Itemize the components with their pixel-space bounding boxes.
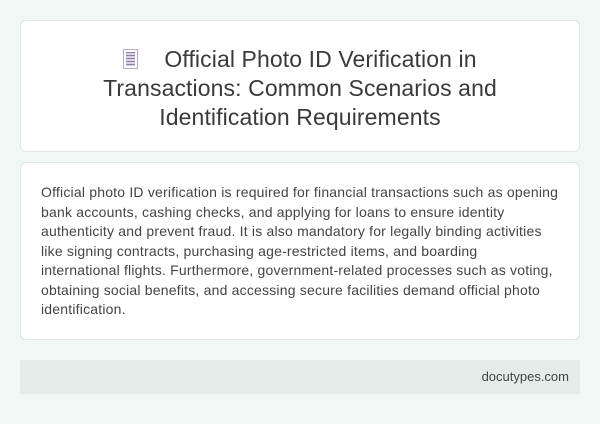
title: Identification Requirements xyxy=(159,104,441,130)
title: Transactions: Common Scenarios and xyxy=(103,75,497,101)
footer xyxy=(20,360,580,394)
icon: document xyxy=(123,49,138,69)
text block: Official photo ID verification is required for financial transactions such as opening xyxy=(41,184,558,200)
text block: obtaining social benefits, and accessing secure facilities demand official photo xyxy=(41,282,540,298)
panel: description xyxy=(20,162,580,340)
panel: title card xyxy=(20,20,580,152)
text block: identification. xyxy=(41,301,126,317)
text block: bank accounts, cashing checks, and applying for loans to ensure identity xyxy=(41,204,504,220)
footer text: docutypes.com xyxy=(482,369,569,384)
title xyxy=(103,46,497,130)
title: Official Photo ID Verification in xyxy=(164,46,477,72)
text block: authenticity and prevent fraud. It is also mandatory for legally binding activities xyxy=(41,223,542,239)
text block: international flights. Furthermore, government-related processes such as voting, xyxy=(41,262,553,278)
text block xyxy=(41,184,558,317)
text block: like signing contracts, purchasing age-restricted items, and boarding xyxy=(41,242,477,258)
